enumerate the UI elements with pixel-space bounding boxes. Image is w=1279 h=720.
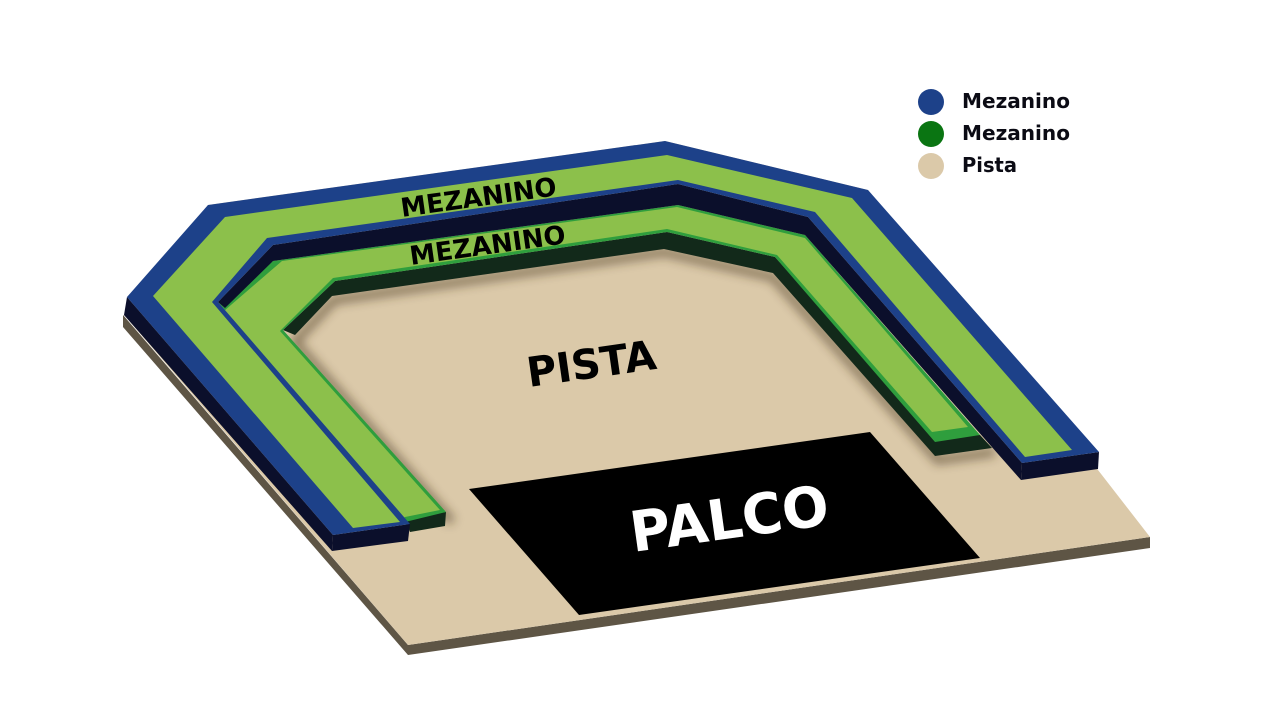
inner tier wall [283,232,992,456]
outer tier inner wall [218,184,1022,480]
shadow under inner mezzanine [295,252,995,522]
stage: palco: PALCO [626,474,833,566]
inner tier front wall [405,512,446,532]
legend item: green mezanino [918,121,1070,147]
outer tier top [127,141,1099,535]
legend item: pista: Pista [962,153,1017,177]
legend item: pista [918,153,1017,179]
outer tier left wall [124,297,333,551]
legend item: blue mezanino [918,89,1070,115]
label: pista: PISTA [524,331,659,397]
outer tier surface [153,155,1072,528]
inner tier top edge [218,205,980,522]
legend [918,89,1070,179]
outer mezzanine tier (blue) [124,141,1099,551]
label: outer mezanino: MEZANINO [399,172,558,224]
label: inner mezanino: MEZANINO [408,220,567,272]
legend item: blue mezanino: Mezanino [962,89,1070,113]
inner mezzanine tier (green) [218,205,992,532]
legend item: green mezanino: Mezanino [962,121,1070,145]
inner tier surface [224,207,968,522]
stage: palco [469,432,980,615]
outer tier right front wall [1021,452,1099,480]
outer tier left front wall [332,524,410,551]
floor: pista base [123,141,1150,655]
